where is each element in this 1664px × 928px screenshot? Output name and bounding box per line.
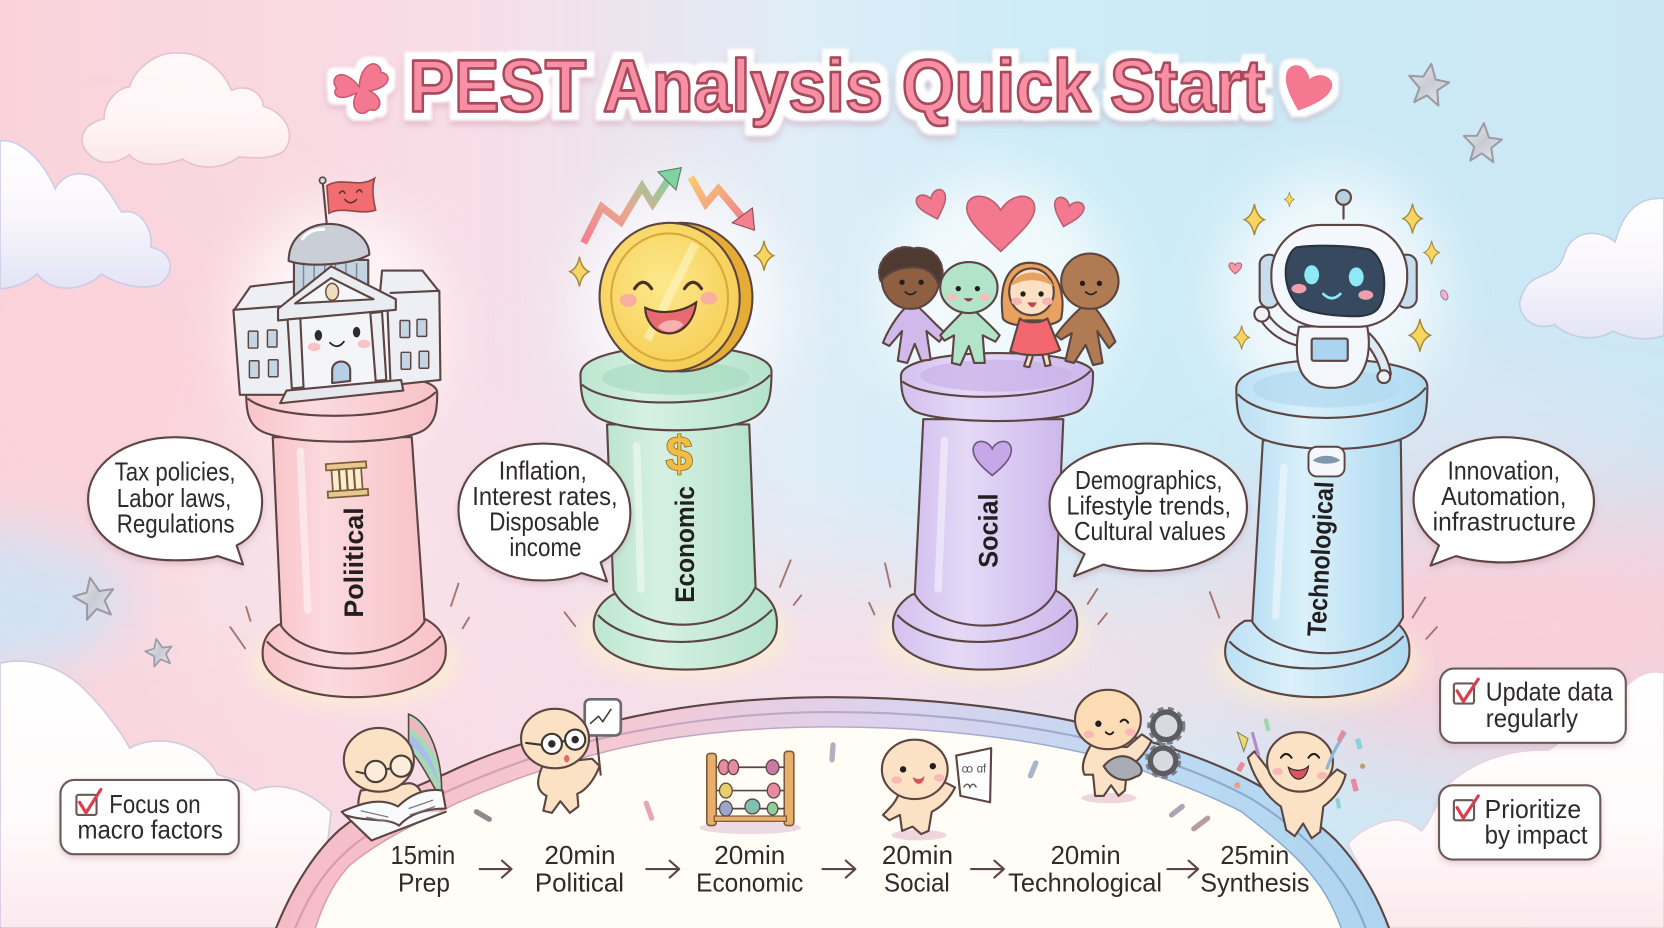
pillar label: Technological (1302, 481, 1340, 637)
cloud: upper left small (82, 53, 289, 167)
arrow (971, 861, 1004, 878)
head (1267, 732, 1333, 792)
pillar shaft (1252, 440, 1403, 653)
pillar label: Economic (670, 486, 700, 603)
callout: political factors: Tax policies, (115, 457, 236, 487)
callout: technological factors (1414, 437, 1594, 566)
head (521, 709, 589, 768)
pillar base (594, 588, 777, 670)
motion lines (1210, 592, 1437, 639)
star (1406, 61, 1451, 107)
band stripe (295, 712, 1366, 928)
body (538, 759, 600, 813)
sparkles (1234, 192, 1439, 352)
small heart and gem (1229, 263, 1449, 301)
callout: political factors: Regulations (117, 509, 235, 539)
step: 15min Prep: 15min (391, 840, 455, 870)
callout: economic factors (458, 444, 630, 582)
head (1271, 225, 1407, 327)
face (1272, 754, 1328, 779)
pillar cap (1236, 359, 1427, 449)
callout: economic factors: Disposable (489, 507, 600, 537)
timeline step: Social character: ꝏ ɑf (961, 763, 987, 776)
timeline step: Social character (882, 740, 991, 840)
step: 20min Political (535, 840, 624, 897)
dome (289, 224, 369, 298)
icon: columns (326, 461, 368, 498)
callout: social factors: Cultural values (1074, 516, 1226, 546)
book (342, 790, 446, 840)
callout: political factors: Labor laws, (117, 483, 231, 513)
timeline step: Prep character (342, 714, 446, 840)
step: 25min Synthesis: 25min (1220, 840, 1289, 870)
timeline step: Political character (521, 699, 621, 813)
steps (280, 380, 403, 403)
face (308, 327, 370, 351)
icon: robot (1229, 190, 1449, 388)
motion lines (869, 563, 1107, 624)
brown child (1056, 254, 1119, 365)
chest screen (1312, 339, 1348, 361)
checklist: Prioritize by impact: Prioritize (1485, 794, 1581, 824)
pillar base (1225, 617, 1409, 697)
girl in red dress (1002, 263, 1063, 367)
icon: heart (1276, 63, 1334, 118)
timeline step: Synthesis character (1234, 718, 1365, 838)
arrow (822, 861, 855, 878)
checklist: Update data regularly: regularly (1486, 703, 1578, 733)
step: 20min Technological (1008, 840, 1162, 897)
panel: Technological pillar (1210, 359, 1437, 697)
step: 25min Synthesis (1200, 840, 1310, 897)
panel: timeline dome (276, 697, 1389, 928)
icon: device (1308, 447, 1345, 476)
checklist: Update data regularly (1440, 669, 1626, 743)
icon: heart (973, 441, 1011, 475)
step: 20min Social: Social (884, 867, 950, 897)
step: 20min Technological: 20min (1051, 840, 1121, 870)
step: 25min Synthesis: Synthesis (1200, 867, 1310, 897)
body (883, 782, 955, 834)
confetti (1234, 718, 1365, 809)
motion lines (565, 560, 801, 626)
gears (1148, 710, 1182, 776)
pillar cap (246, 372, 437, 442)
callout: political factors (88, 437, 262, 565)
callout: technological factors: Innovation, (1448, 456, 1560, 486)
pillar cap (580, 346, 772, 430)
callout: economic factors: Interest rates, (472, 481, 618, 511)
head (882, 740, 948, 799)
body (1297, 325, 1369, 388)
arrow (480, 861, 512, 878)
right wing (371, 271, 440, 387)
step: 20min Social: 20min (882, 840, 953, 870)
callout: social factors: Lifestyle trends, (1067, 491, 1231, 521)
icon: flower (331, 61, 394, 118)
pillar shaft (273, 437, 424, 653)
step: 20min Political: Political (535, 867, 624, 897)
door (332, 362, 350, 383)
step: 15min Prep: Prep (398, 867, 450, 897)
panel: Economic pillar (565, 346, 801, 670)
flag (319, 177, 376, 225)
pillar base (893, 590, 1077, 670)
face (1292, 265, 1373, 300)
cloud: bottom right (1348, 672, 1664, 928)
body (1083, 734, 1151, 796)
step: 20min Economic: 20min (714, 840, 785, 870)
paper (956, 748, 991, 802)
pediment (278, 266, 396, 320)
checklist: Focus on macro factors (60, 780, 239, 854)
mint child (940, 262, 1000, 365)
pillar label: Poliitical (339, 507, 369, 618)
callout: technological factors: infrastructure (1433, 507, 1576, 537)
callout: economic factors: Inflation, (499, 456, 587, 486)
columns (288, 318, 304, 388)
star (1462, 122, 1503, 163)
pillar shaft (607, 424, 756, 625)
step: 20min Economic (696, 840, 803, 897)
icon: abacus (699, 751, 801, 834)
sign (596, 734, 601, 775)
glow around pillar bases (250, 592, 1423, 706)
panel: Political pillar (230, 372, 469, 697)
icon: dollar sign: $ (666, 428, 693, 482)
glasses (525, 730, 585, 754)
timeline labels (391, 840, 1310, 897)
step: 20min Political: 20min (544, 840, 616, 870)
body (1248, 751, 1346, 838)
heading text: PEST Analysis Quick Start (409, 44, 1265, 127)
pillar cap (901, 353, 1093, 421)
icon: government building (233, 177, 440, 403)
callout: social factors: Demographics, (1075, 465, 1223, 495)
step: 20min Technological: Technological (1008, 867, 1162, 897)
glasses (356, 756, 412, 782)
checklist: Focus on macro factors: macro factors (77, 814, 223, 844)
face (1084, 720, 1136, 738)
timeline step: Technological character (1075, 690, 1182, 803)
step: 20min Social (882, 840, 953, 897)
windows (248, 319, 429, 378)
up arrow (584, 176, 671, 243)
down arrow (691, 177, 745, 221)
face (891, 763, 944, 784)
icon: four friends holding hands (879, 247, 1119, 367)
motion lines (230, 584, 469, 648)
dome tick marks (476, 745, 1208, 829)
head (344, 728, 414, 792)
left arm (1264, 316, 1303, 342)
antenna (1343, 202, 1345, 219)
rainbow band (276, 697, 1389, 928)
callout: technological factors: Automation, (1441, 481, 1566, 511)
right arm (1367, 337, 1386, 374)
arrow (1167, 861, 1198, 878)
purple child (879, 247, 946, 363)
glow behind pillar tops (233, 175, 1443, 451)
cloud: bottom left (0, 661, 331, 928)
checklist: Focus on macro factors: Focus on (109, 789, 201, 819)
rainbow flag (409, 714, 442, 800)
star (70, 574, 118, 621)
title (331, 44, 1334, 127)
icon: gold sparkles (570, 241, 774, 287)
arrow (646, 861, 679, 878)
callout: economic factors: income (509, 532, 582, 562)
step: 15min Prep (391, 840, 455, 897)
icon: smiling coin (595, 218, 757, 376)
mouth (564, 755, 569, 762)
left wing (233, 281, 308, 395)
cloud: left (0, 141, 170, 289)
step: 20min Economic: Economic (696, 867, 803, 897)
callout: social factors (1050, 444, 1247, 576)
central block (289, 305, 391, 395)
pillar label: Social (974, 493, 1004, 568)
head (1075, 690, 1141, 749)
pillar base (263, 619, 446, 697)
panel: Social pillar (869, 353, 1107, 670)
inner line (315, 727, 1341, 928)
dome interior (276, 697, 1389, 928)
outer line (276, 697, 1389, 928)
icon: market trend arrows (584, 168, 755, 243)
wrench (1104, 756, 1142, 780)
screen (1286, 246, 1384, 316)
icon: hearts (915, 188, 1085, 251)
body (358, 783, 422, 817)
pillar shaft (915, 419, 1063, 626)
checklist: Prioritize by impact: by impact (1485, 820, 1588, 850)
cloud: right (1520, 198, 1664, 339)
star (143, 636, 175, 668)
checklist: Update data regularly: Update data (1486, 676, 1614, 706)
checklist: Prioritize by impact (1439, 785, 1600, 860)
headphones (1260, 255, 1279, 308)
